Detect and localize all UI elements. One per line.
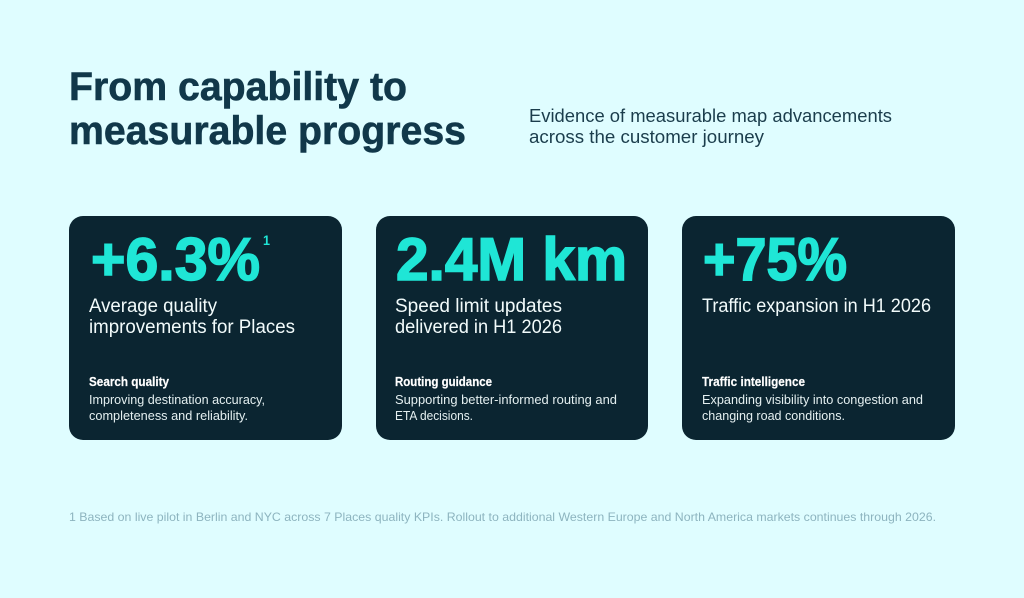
- stat description: Speed limit updates: [395, 296, 562, 317]
- detail text: [702, 393, 923, 423]
- title: From capability to: [69, 65, 407, 109]
- stat: 2.4M km: 2.4M km: [396, 226, 627, 293]
- label: traffic intelligence: Traffic intelligence: [702, 375, 805, 389]
- stat description: improvements for Places: [89, 317, 295, 338]
- detail text: Supporting better-informed routing and: [395, 393, 617, 407]
- detail text: Expanding visibility into congestion and: [702, 393, 923, 407]
- detail text: [395, 393, 617, 423]
- title: measurable progress: [69, 109, 466, 153]
- detail text: [89, 393, 265, 423]
- detail text: changing road conditions.: [702, 409, 845, 423]
- stat description: delivered in H1 2026: [395, 317, 562, 338]
- stat description: Traffic expansion in H1 2026: [702, 296, 931, 317]
- panel: speed limits: [376, 216, 648, 440]
- stat description: Average quality: [89, 296, 217, 317]
- title: [69, 65, 466, 153]
- stat description: [395, 296, 562, 338]
- detail text: Improving destination accuracy,: [89, 393, 265, 407]
- panel: places quality: [69, 216, 342, 440]
- detail text: completeness and reliability.: [89, 409, 248, 423]
- stat: +75%: +75%: [703, 226, 847, 293]
- detail text: ETA decisions.: [395, 409, 473, 423]
- label: search quality: Search quality: [89, 375, 169, 389]
- subtitle: [529, 106, 892, 147]
- subtitle: across the customer journey: [529, 127, 764, 147]
- stat description: [89, 296, 295, 338]
- panel: traffic: [682, 216, 955, 440]
- stat: +6.3%: +6.3%: [91, 226, 260, 293]
- footnote: 1 Based on live pilot in Berlin and NYC across 7 Places quality KPIs. Rollout to additional Western Europe and North America markets continues through 2026.: [69, 510, 936, 524]
- label: routing guidance: Routing guidance: [395, 375, 492, 389]
- subtitle: Evidence of measurable map advancements: [529, 106, 892, 126]
- footnote marker: 1: [263, 232, 270, 248]
